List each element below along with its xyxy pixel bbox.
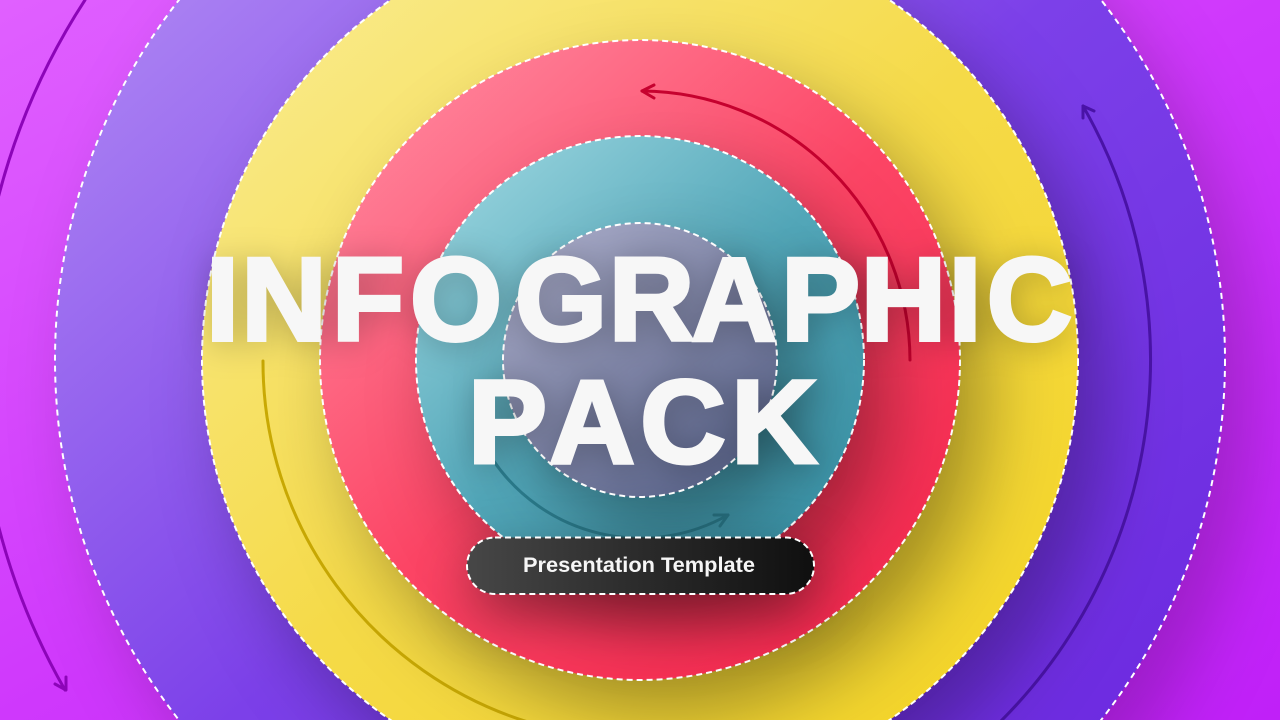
arrow: red arc	[642, 85, 910, 360]
ring: yellow	[202, 0, 1078, 720]
title	[206, 234, 1072, 488]
arrow: teal arc	[493, 460, 728, 538]
arrow: yellow arc	[263, 361, 528, 720]
pill: subtitle	[467, 538, 814, 594]
arrow: outer magenta arc	[0, 0, 85, 690]
arrow: purple arc	[1000, 106, 1151, 720]
subtitle text: Presentation Template	[523, 554, 755, 577]
ring: teal	[416, 136, 864, 584]
circle: grey core	[503, 223, 777, 497]
ring: red	[320, 40, 960, 680]
title line 2: PACK	[468, 356, 817, 488]
title line 1: INFOGRAPHIC	[206, 234, 1072, 366]
